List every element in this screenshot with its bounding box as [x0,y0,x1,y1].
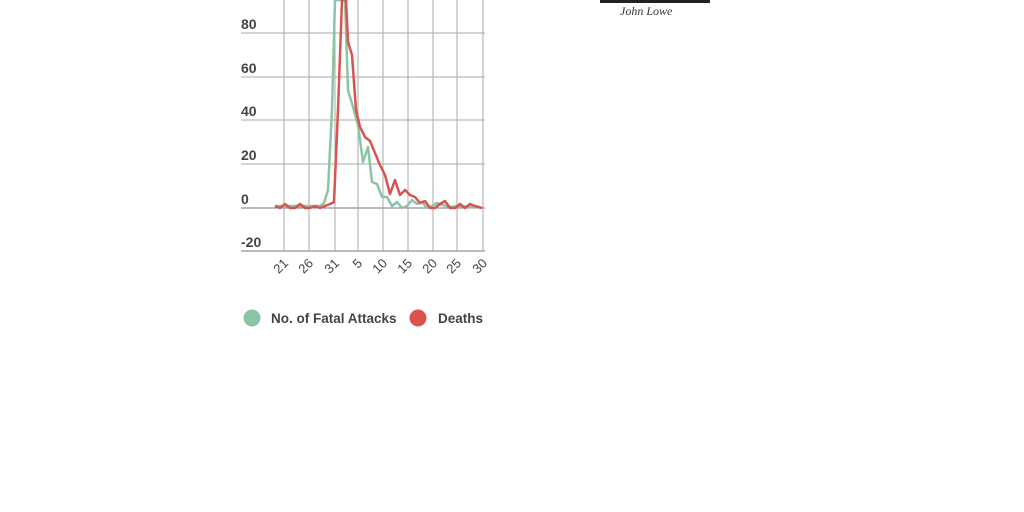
legend: No. of Fatal Attacks [271,311,397,326]
x axis labels: 21 [270,256,291,276]
y axis labels: -20 [241,234,261,250]
x axis labels: 30 [469,256,490,276]
x axis labels: 31 [321,256,342,276]
x axis labels: 5 [349,256,365,271]
y axis labels: 60 [241,60,257,76]
y axis labels: 20 [241,147,257,163]
y axis labels: 40 [241,103,257,119]
x axis labels: 15 [394,256,415,276]
legend: Deaths [438,311,483,326]
legend [244,310,483,326]
x axis labels [270,256,490,276]
series: fatal attacks [275,0,482,208]
signature [600,0,710,18]
grid [241,0,485,251]
y axis labels: 80 [241,16,257,32]
x axis labels: 26 [295,256,316,276]
x axis labels: 25 [443,256,464,276]
x axis labels: 20 [419,256,440,276]
y axis labels: 0 [241,191,249,207]
signature: John Lowe [620,4,673,18]
y axis labels [241,16,261,250]
series: deaths [275,0,482,208]
x axis labels: 10 [369,256,390,276]
